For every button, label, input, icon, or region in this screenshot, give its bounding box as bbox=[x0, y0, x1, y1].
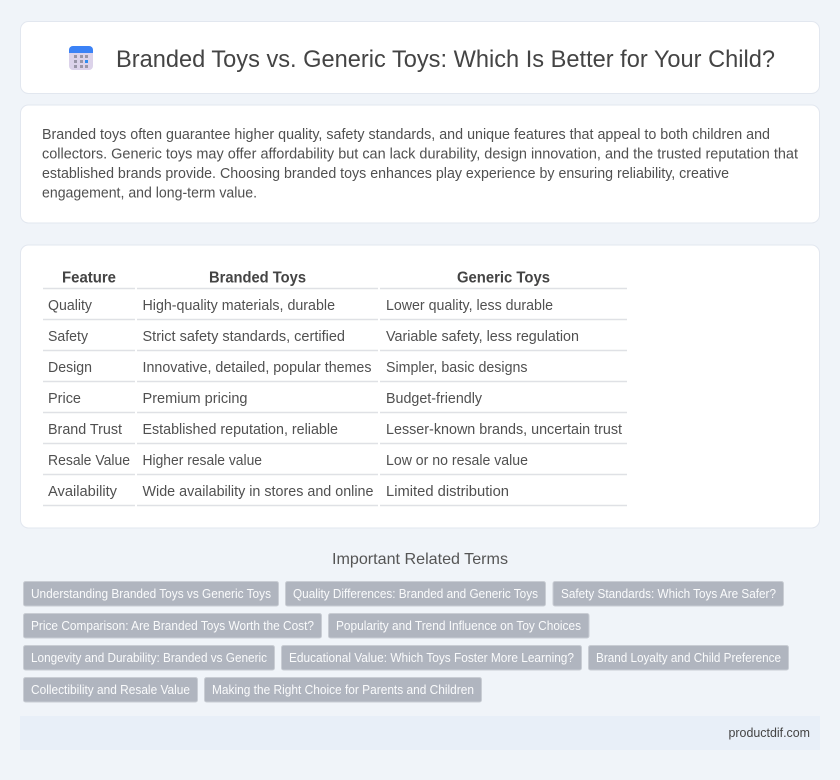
table row: Design: Simpler, basic designs bbox=[386, 360, 528, 376]
table row: Brand Trust: Lesser-known brands, uncertain trust bbox=[386, 422, 622, 438]
table row: Safety bbox=[48, 329, 579, 345]
tag bbox=[204, 678, 482, 702]
tag bbox=[24, 646, 274, 670]
table row: Brand Trust: Brand Trust bbox=[48, 422, 122, 438]
table row: Quality: Lower quality, less durable bbox=[386, 298, 553, 314]
tag: Price Comparison: Are Branded Toys Worth the Cost? bbox=[31, 619, 314, 633]
table row: Price: Premium pricing bbox=[142, 391, 248, 407]
footer: productdif.com bbox=[728, 726, 810, 740]
table row: Brand Trust bbox=[48, 422, 622, 438]
tag: Longevity and Durability: Branded vs Generic bbox=[31, 651, 267, 665]
table row: Resale Value: Low or no resale value bbox=[386, 453, 528, 469]
tag bbox=[24, 582, 278, 606]
text block: introduction bbox=[42, 127, 798, 202]
footer bbox=[20, 716, 820, 750]
table row: Price: Price bbox=[48, 391, 81, 407]
tag: Collectibility and Resale Value bbox=[31, 683, 190, 697]
table row: Design: Innovative, detailed, popular themes bbox=[142, 360, 372, 376]
text block: introduction: established brands provide. Choosing branded toys enhances play experience by ensuring reliability, creative bbox=[42, 166, 729, 182]
table header row: Branded Toys bbox=[209, 270, 306, 286]
panel: title header bbox=[20, 22, 820, 94]
table row: Availability: Availability bbox=[48, 484, 118, 500]
tag bbox=[24, 678, 198, 702]
tag bbox=[282, 646, 582, 670]
table row: Design bbox=[48, 360, 528, 376]
panel: comparison table bbox=[20, 245, 820, 528]
table row: Safety: Safety bbox=[48, 329, 89, 345]
tag: Popularity and Trend Influence on Toy Choices bbox=[336, 619, 581, 633]
table row: Design: Design bbox=[48, 360, 92, 376]
table row: Availability bbox=[48, 484, 509, 500]
table header row: Feature bbox=[62, 270, 116, 286]
tag: Quality Differences: Branded and Generic Toys bbox=[293, 587, 538, 601]
table row: Resale Value: Resale Value bbox=[48, 453, 130, 469]
tag bbox=[588, 646, 788, 670]
tag: Understanding Branded Toys vs Generic Toys bbox=[31, 587, 271, 601]
text block: introduction: collectors. Generic toys may offer affordability but can lack durability, design innovation, and the trusted reputation that bbox=[42, 146, 798, 162]
table row: Brand Trust: Established reputation, reliable bbox=[142, 422, 338, 438]
tag bbox=[286, 582, 546, 606]
tag: Educational Value: Which Toys Foster More Learning? bbox=[289, 651, 574, 665]
table row: Availability: Wide availability in stores and online bbox=[142, 484, 374, 500]
icon: calendar grid bbox=[69, 46, 93, 70]
table row: Safety: Variable safety, less regulation bbox=[386, 329, 579, 345]
tag bbox=[24, 614, 322, 638]
tag: Brand Loyalty and Child Preference bbox=[596, 651, 781, 665]
heading: related terms: Important Related Terms bbox=[332, 551, 508, 568]
tag bbox=[553, 582, 784, 606]
table row: Safety: Strict safety standards, certified bbox=[142, 329, 345, 345]
table row: Resale Value: Higher resale value bbox=[142, 453, 262, 469]
table header row bbox=[62, 270, 550, 286]
title: Branded Toys vs. Generic Toys: Which Is Better for Your Child? bbox=[116, 46, 775, 73]
tag: Making the Right Choice for Parents and Children bbox=[212, 683, 474, 697]
panel: introduction text bbox=[20, 105, 820, 223]
text block: introduction: Branded toys often guarantee higher quality, safety standards, and unique features that appeal to both children and bbox=[42, 127, 770, 143]
table header row: Generic Toys bbox=[457, 270, 550, 286]
text block: introduction: engagement, and long-term value. bbox=[42, 186, 257, 202]
table row: Quality bbox=[48, 298, 553, 314]
table row: Resale Value bbox=[48, 453, 528, 469]
table row: Quality: Quality bbox=[48, 298, 93, 314]
table row: Availability: Limited distribution bbox=[386, 484, 509, 500]
table row: Price bbox=[48, 391, 483, 407]
table row: Price: Budget-friendly bbox=[386, 391, 483, 407]
tag: Safety Standards: Which Toys Are Safer? bbox=[561, 587, 776, 601]
tag bbox=[328, 614, 589, 638]
panel: related term tags bbox=[24, 582, 788, 702]
table row: Quality: High-quality materials, durable bbox=[142, 298, 335, 314]
